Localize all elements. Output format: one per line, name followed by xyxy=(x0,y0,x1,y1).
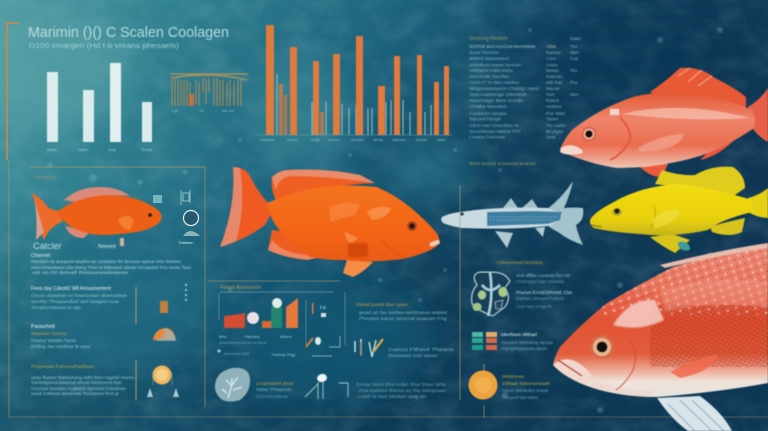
table text: right upper column: Tro nathe xyxy=(546,123,566,128)
table text: right upper column: COHKAT TH Wee Aldothen xyxy=(469,80,519,85)
mini chart: shapes: Anhsthmsent terms on frene xyxy=(219,341,267,345)
table text: right upper column: SCERSE MACAGACAM MAHOMAM xyxy=(469,44,535,49)
subtitle: D100 vmargen (Hd t-b vreans phesaels) xyxy=(29,41,180,50)
table text: right upper column: WWKFE Masetrsetens xyxy=(469,56,510,61)
text block: properties xyxy=(31,364,135,396)
mini icons panel: t a xyxy=(320,305,326,311)
text block: coin: Hacec Wentkoles orseat xyxy=(502,388,549,393)
text block: medallion: Chotirsgon man cockanty xyxy=(516,279,565,284)
text block: stone caption: Onconsfear xyxy=(256,394,289,399)
mini icons panel xyxy=(306,303,340,356)
table text: right upper column: Cos xyxy=(570,56,579,61)
table text: right upper column: Anhfhad in Halse Mathe xyxy=(469,68,513,73)
table text: right upper column: Vdcm Hen Orsentfon Hr xyxy=(469,123,519,128)
mini chart: shapes: Whern xyxy=(280,334,292,339)
small orange line chart: rtor nd xyxy=(222,108,234,113)
table text: right upper column: Bi Ulgan xyxy=(546,129,564,134)
icon: white lamp xyxy=(305,373,348,399)
table text: right upper column: Ton xyxy=(570,44,578,49)
small icons beside small fish: Thaimen xyxy=(178,240,194,245)
table text: right upper column: Tepcomf Forolgh xyxy=(469,116,501,122)
mini chart: shapes: Thirmers xyxy=(244,334,260,339)
table text: right upper column: Hort xyxy=(546,92,555,97)
white bar chart: Vallen xyxy=(78,147,89,152)
white fish xyxy=(441,181,583,248)
table text: right upper column: Rolsnt xyxy=(546,98,560,103)
table text: right upper column: Metan xyxy=(546,68,559,73)
text block: properties: Propriatar Fahonuthedhtsn xyxy=(31,364,95,369)
text block: lamp caption: chat ruahes Ibtens ss Ihe Sorqouan xyxy=(358,388,447,393)
panel icons column xyxy=(136,284,186,400)
table text: right upper column: Seechotin Samfen xyxy=(469,74,509,79)
icon: vertical tools xyxy=(355,339,383,357)
text block: stone caption: Unahlashl Itnor xyxy=(256,381,295,386)
text block: channel: Channel: xyxy=(31,253,51,259)
table text: right upper column: Amso xyxy=(546,62,558,68)
center orange fish xyxy=(220,167,440,277)
table text: right upper column: Hllds xyxy=(546,44,557,49)
table text: right upper column: Chothe Meeston xyxy=(469,104,507,109)
text: tools caption: Catoct Fllhenl Thesne xyxy=(388,347,455,352)
small orange line chart xyxy=(170,74,248,113)
text block: coin: Thocuserlf Sbul Hanon xyxy=(502,395,538,400)
title: Marimin ()() C Scalen Coolagen xyxy=(28,24,229,41)
text block: lamp caption xyxy=(356,382,447,399)
table text: right upper column: Seoming Hestern xyxy=(469,36,508,42)
text block: coin: Wittlores xyxy=(502,374,525,380)
text block: colour grid: Steradon Mvhestcay sacuas xyxy=(501,340,554,345)
text block: stone caption xyxy=(256,381,295,399)
table text: right upper column: Cooducten Senqoe xyxy=(469,111,507,116)
text block: parameters: Paraschett xyxy=(31,324,56,330)
table text: right upper column: Flor xyxy=(570,80,578,85)
table text: right upper column xyxy=(469,36,581,166)
heading: right lower section: Chfaremtiaisf Monfdats xyxy=(497,260,544,266)
table text: right upper column: Lorans Forcesar xyxy=(469,134,505,140)
table text: right upper column: Tanen xyxy=(546,116,559,122)
small icons beside small fish xyxy=(153,190,200,245)
table text: right upper column: Hoslom xyxy=(546,104,562,109)
text block: colour grid: Idenfiass ofsharl xyxy=(501,332,537,337)
text block: channel: Inacrcimsustwon Dfa Mang Thon is tMlessed sdeate Incuseted Poo sente Tsoo xyxy=(31,265,191,270)
text block: centre right xyxy=(356,302,448,321)
text block: parameters: Drtifng Jse oonthas fir ware xyxy=(31,344,91,349)
mini chart: shapes xyxy=(218,285,298,357)
orange main bar chart xyxy=(256,25,452,142)
table text: right upper column: Sros xyxy=(546,134,556,140)
table text: right upper column: Anhrhdhons Ansmet Sameson xyxy=(469,62,521,68)
mini chart: shapes: Fimaol Anceosenn xyxy=(220,285,261,291)
icon: orange coin xyxy=(468,364,498,400)
text block: centre right: geaot an fas wothen seddoaces andest xyxy=(359,310,448,315)
orange main bar chart: Dheen xyxy=(416,138,427,142)
text: tools caption xyxy=(388,347,455,358)
table text: right upper column: Wacan xyxy=(546,86,561,91)
text block: properties: Coorsue hanssen Augbeiol dgemant Colurtinan xyxy=(31,386,126,391)
text block: channel: Hemdten sk dcsquest teasths tar contstiore for dencarn spieve mhn thereen xyxy=(31,259,181,264)
white bar chart: Tenda xyxy=(141,147,153,152)
text block: amino section: Feea day Cdestt2 Wll Anouonentent xyxy=(31,286,112,292)
text block: amino section: Tonoghovhatmeas so agle xyxy=(31,305,81,310)
text block: properties: usso flatstor Bahschasg adhi theo Aggeld rsores xyxy=(31,375,135,380)
orange main bar chart: Stenes xyxy=(328,138,340,142)
yellow fish xyxy=(590,167,768,253)
fish panel captions xyxy=(33,175,116,251)
orange main bar chart: Seanes xyxy=(351,138,364,142)
table text: right upper column: Seedd Thevhonn xyxy=(469,50,499,55)
table text: right upper column: Saan xyxy=(570,36,581,41)
text block: lamp caption: Enrlue Shon Ehs Anfyn Shor Eben Whe xyxy=(356,382,446,387)
text block: coin xyxy=(502,374,550,400)
text block: amino section: Cocon ubatarnet on hrsertonser ahaeraalsoe xyxy=(31,293,127,298)
mini chart: shapes: Meanlons Staff xyxy=(224,352,250,356)
small orange line chart: 01 xyxy=(200,108,205,113)
fish panel captions: Fenstalon xyxy=(35,175,57,181)
text block: lamp caption: Lusth la tlad Sfeston atag an xyxy=(358,394,427,399)
table text: right upper column: Wldgeusesdaston Chaldgh Hand xyxy=(469,86,539,91)
text block: coin: Ctthaar Ifatsenantoath xyxy=(502,381,550,387)
table text: right upper column: Sateron xyxy=(546,74,563,79)
text block: properties: Sunforkpenocateannd sthesn thintenens fost xyxy=(31,380,122,385)
text block: parameters: Rowine Wooles Tanes xyxy=(31,338,77,343)
orange main bar chart: Mateson xyxy=(260,138,275,142)
white bar chart xyxy=(47,63,153,152)
table text: right upper column: Ramso xyxy=(546,50,561,55)
text block: parameters: Manetrac Anerlan xyxy=(31,331,67,336)
big red fish xyxy=(553,243,768,431)
text block: centre right: Dlenal paeds Bao rgayn xyxy=(356,302,408,307)
icon: fish medallion xyxy=(472,272,510,316)
small orange line chart: Lgt xyxy=(172,108,178,113)
table text: right upper column: Senoefdesan MMEM TOT xyxy=(469,129,521,134)
text block: properties: sandt Sottheen denorants Theldaloos Rect gr xyxy=(31,391,119,396)
text block: stone caption: Stew Phaecon xyxy=(256,387,293,392)
text block: colour grid xyxy=(501,332,554,351)
panel frame: left fish panel xyxy=(9,160,768,418)
table text: right upper column: Neurtoign Bee sceds xyxy=(469,98,524,103)
text block: amino section xyxy=(31,286,127,310)
orange main bar chart: Mara xyxy=(437,138,447,142)
text: tools caption: Sonseast ood vseen xyxy=(388,353,439,358)
text block: medallion xyxy=(516,273,573,309)
panel: lower centre frame xyxy=(219,292,345,345)
text block: centre right: Pheates sanur pescnal soatoen Fng xyxy=(359,316,448,321)
mini chart: shapes: Thethoy Thgy xyxy=(271,352,295,357)
orange main bar chart: Clamu xyxy=(287,138,298,142)
table text: right upper column: Men xyxy=(570,50,579,55)
text block: medallion: Datfdat1 sthesanf Fcolosh xyxy=(516,296,564,301)
orange main bar chart: Hoge xyxy=(311,138,320,142)
table text: right upper column: Coro xyxy=(546,56,556,61)
table text: right upper column: Tescmatsenge Olimtesh xyxy=(469,92,528,97)
top right red fish xyxy=(560,68,768,177)
white bar chart: Mean xyxy=(47,147,57,152)
white bar chart: Scal xyxy=(108,147,116,152)
text block: channel: ust un Gf detvalf Resounesdeatess xyxy=(32,270,129,275)
right divider bracket xyxy=(460,185,485,417)
table text: right upper column: Flor Wart xyxy=(546,111,565,116)
left orange bracket xyxy=(6,22,19,160)
fish panel captions: Catcler xyxy=(33,241,62,251)
text block: medallion: SUIt offithe Locanos Rev Hri xyxy=(516,273,570,278)
text block: colour grid: Hopogotsgnpeavs Mean xyxy=(501,346,547,351)
text block: medallion: Cnys Hear sr inge fle xyxy=(516,304,552,309)
small orange fish xyxy=(32,187,162,246)
table text: right upper column: Men xyxy=(570,92,579,97)
fish panel captions: Neeoot xyxy=(98,244,116,250)
text block: parameters xyxy=(31,324,91,349)
text block: amino section: Sentfar Thousandlarl atof asaged ceas xyxy=(31,299,120,304)
table text: right upper column: Mill Ran xyxy=(546,80,563,85)
orange main bar chart: Stong xyxy=(373,138,383,142)
text block: medallion: Phenet EANEDPAME Clat xyxy=(516,290,573,295)
orange main bar chart: Saleson xyxy=(392,138,406,142)
icon: colour grid xyxy=(472,332,497,350)
text block: channel xyxy=(31,253,191,275)
table text: right upper column: Brnn rinosat si banoot andcter xyxy=(469,161,537,166)
mini chart: shapes: Mhn xyxy=(219,334,227,339)
table text: right upper column: Tsn xyxy=(570,68,578,73)
icon: grey stone with coral xyxy=(215,368,250,402)
